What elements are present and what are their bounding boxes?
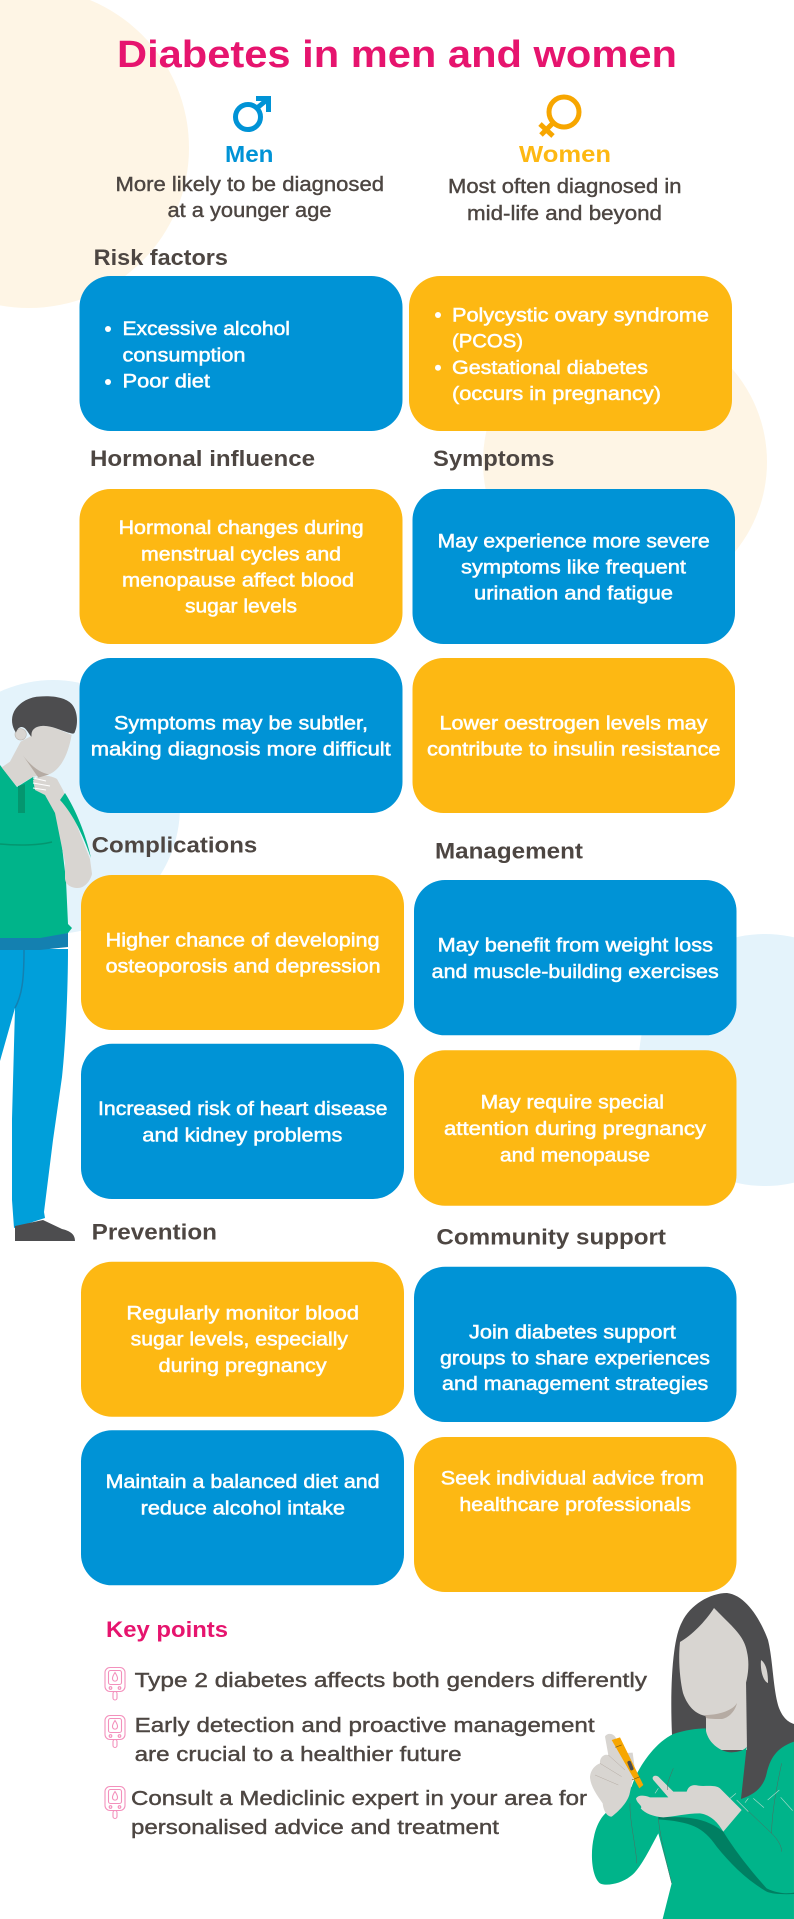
text: key point 2: Early detection and proactive management (135, 1715, 595, 1737)
panel: risk factors men (80, 276, 402, 431)
background circle: cream top left (0, 0, 189, 308)
panel: complications men: Increased risk of heart disease (98, 1099, 387, 1120)
illustration: woman (590, 1593, 794, 1919)
panel: risk factors women: Polycystic ovary syndrome (452, 306, 709, 327)
panel: hormonal influence women: menstrual cycles and (141, 544, 341, 565)
panel: complications women (81, 875, 404, 1030)
panel: management women: and menopause (500, 1145, 650, 1166)
panel: prevention men (81, 1430, 404, 1585)
panel: hormonal influence women: Hormonal changes during (119, 518, 364, 539)
heading: risk factors: Risk factors (94, 245, 228, 270)
icon: male symbol (236, 98, 268, 130)
illustration: man (0, 696, 92, 1241)
panel: symptoms subtler men (80, 658, 402, 813)
man head (2, 696, 77, 787)
text: key point 1: Type 2 diabetes affects both genders differently (135, 1670, 647, 1692)
text: key point 2: are crucial to a healthier future (135, 1744, 462, 1766)
panel: complications men: and kidney problems (142, 1125, 342, 1146)
panel: community support women: Seek individual advice from (441, 1468, 704, 1489)
panel: management women: May require special (481, 1092, 664, 1113)
panel: risk factors men: Poor diet (122, 372, 211, 393)
heading: women: Women (519, 141, 611, 167)
text: men diagnosis age (116, 174, 384, 222)
panel: management men: and muscle-building exercises (432, 962, 719, 983)
text: key point 3: Consult a Mediclinic expert in your area for (131, 1788, 587, 1810)
panel: risk factors women: (PCOS) (452, 332, 523, 353)
panel: oestrogen women (412, 658, 735, 813)
panel: oestrogen women: Lower oestrogen levels may (440, 713, 708, 734)
panel: prevention women (81, 1262, 404, 1417)
panel: risk factors women: Gestational diabetes (452, 358, 648, 379)
panel: risk factors women: (occurs in pregnancy) (452, 384, 661, 405)
panel: community support men: Join diabetes support (469, 1322, 677, 1343)
heading: complications: Complications (92, 833, 257, 858)
panel: hormonal influence women (80, 489, 402, 644)
woman face (679, 1608, 748, 1716)
panel: community support men: and management strategies (442, 1374, 708, 1395)
panel: complications men (81, 1044, 404, 1199)
panel: symptoms men: urination and fatigue (474, 584, 673, 605)
heading: symptoms: Symptoms (433, 446, 554, 471)
panel: prevention women: Regularly monitor blood (126, 1303, 359, 1324)
text: key point 3 (131, 1788, 587, 1839)
panel: oestrogen women: contribute to insulin resistance (427, 740, 720, 761)
heading: men: Men (225, 141, 274, 167)
panel: risk factors men: consumption (122, 346, 246, 367)
panel: prevention men: reduce alcohol intake (141, 1498, 345, 1519)
panel: community support men: groups to share experiences (440, 1348, 710, 1369)
text: women diagnosis age (448, 176, 682, 225)
text: men diagnosis age: More likely to be diagnosed (116, 174, 384, 196)
panel: prevention women: sugar levels, especially (131, 1330, 349, 1351)
panel: prevention women: during pregnancy (158, 1356, 327, 1377)
panel: hormonal influence women: sugar levels (185, 597, 297, 618)
text: women diagnosis age: mid-life and beyond (467, 203, 662, 225)
text: key point 2 (135, 1715, 595, 1766)
icon: glucose meter 3 (105, 1786, 125, 1818)
text: women diagnosis age: Most often diagnosed in (448, 176, 682, 198)
panel: community support men (414, 1267, 736, 1422)
background circle: blue right (639, 934, 794, 1186)
panel: management women (414, 1050, 736, 1206)
icon: glucose meter 1 (105, 1668, 125, 1700)
text: men diagnosis age: at a younger age (168, 200, 332, 222)
title: Diabetes in men and women (117, 34, 677, 76)
panel: symptoms subtler men: making diagnosis more difficult (91, 740, 392, 761)
panel: risk factors women (409, 276, 732, 431)
panel: symptoms men: May experience more severe (438, 532, 710, 553)
panel: hormonal influence women: menopause affect blood (122, 571, 354, 592)
panel: community support women: healthcare professionals (459, 1495, 691, 1516)
background circle: blue left (0, 680, 180, 934)
panel: risk factors men: Excessive alcohol (122, 319, 290, 340)
text: key point 3: personalised advice and treatment (131, 1817, 500, 1839)
heading: management: Management (435, 838, 584, 863)
panel: community support women (414, 1437, 736, 1592)
panel: management men: May benefit from weight loss (438, 936, 713, 957)
heading: community support: Community support (436, 1224, 667, 1249)
icon: female symbol (540, 97, 579, 136)
heading: key points: Key points (106, 1617, 228, 1642)
icon: glucose meter 2 (105, 1716, 125, 1748)
panel: prevention men: Maintain a balanced diet and (106, 1472, 380, 1493)
panel: symptoms men: symptoms like frequent (461, 558, 687, 579)
panel: management men (414, 880, 736, 1035)
heading: prevention: Prevention (92, 1219, 217, 1244)
panel: symptoms subtler men: Symptoms may be subtler, (114, 713, 368, 734)
panel: management women: attention during pregnancy (444, 1119, 707, 1140)
background circle: cream right (483, 320, 767, 604)
woman body and hands (590, 1728, 794, 1919)
panel: symptoms men (412, 489, 735, 644)
panel: complications women: osteoporosis and depression (106, 957, 381, 978)
panel: complications women: Higher chance of developing (106, 930, 380, 951)
heading: hormonal influence: Hormonal influence (90, 446, 315, 471)
